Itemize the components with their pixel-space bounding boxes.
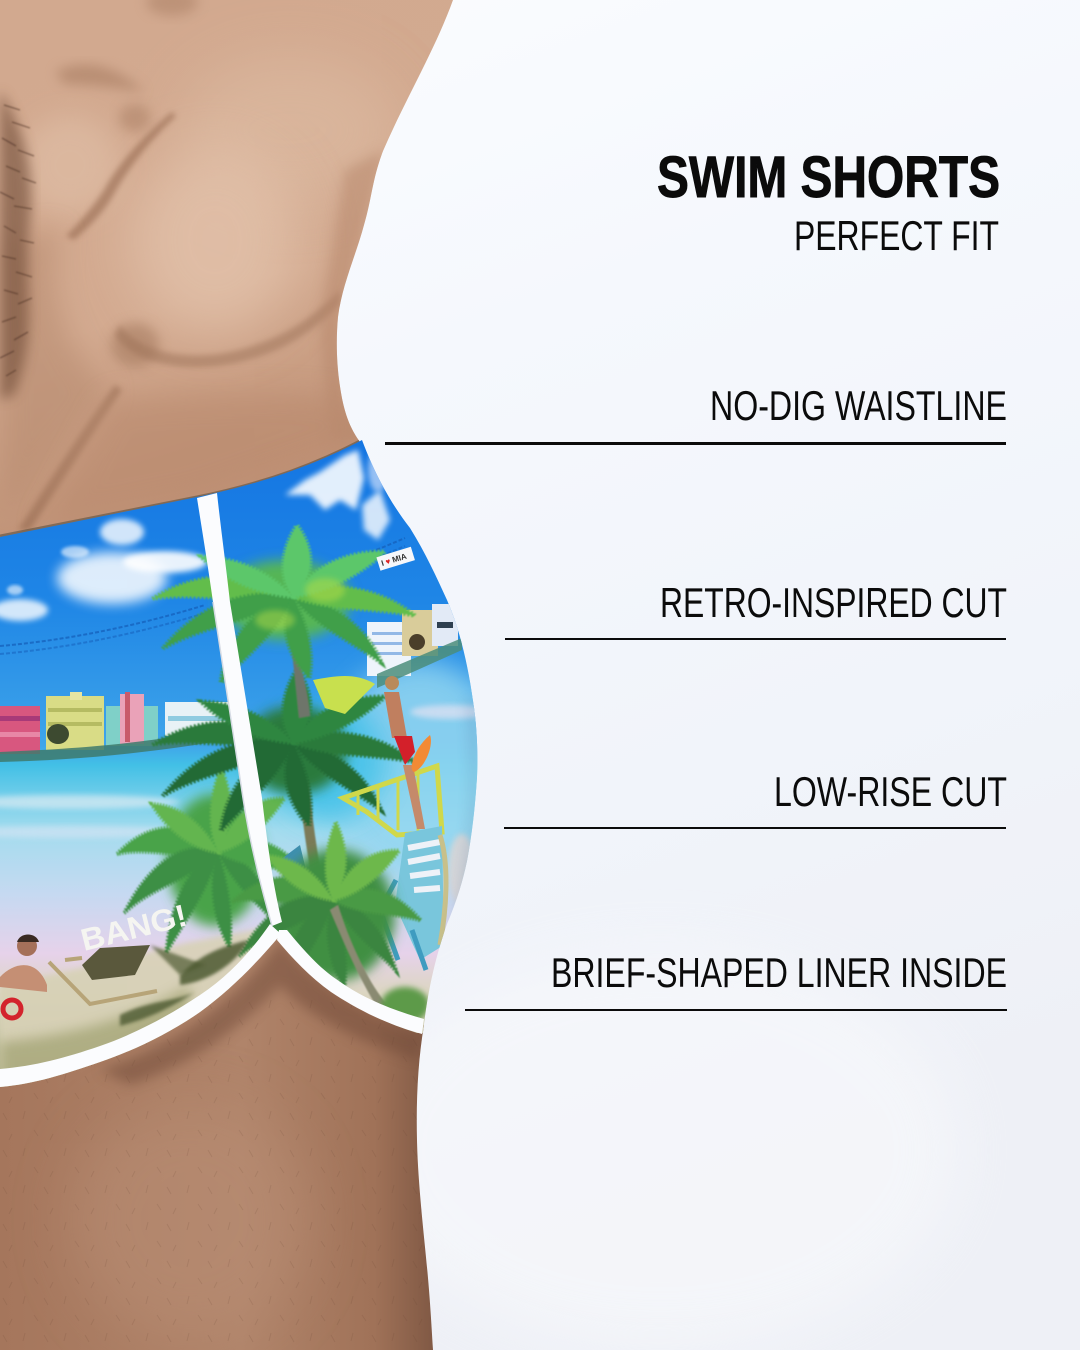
chest hair bbox=[0, 90, 36, 400]
beach sunbather bbox=[0, 934, 47, 1018]
model leg bbox=[0, 938, 433, 1350]
title bbox=[657, 145, 1000, 259]
hip shading bbox=[452, 702, 477, 909]
model torso bbox=[0, 0, 460, 560]
rib arc shadow bbox=[115, 290, 340, 367]
rib highlight bbox=[130, 145, 300, 335]
garment label bbox=[376, 547, 415, 571]
front seam piping bbox=[197, 493, 282, 926]
skyline right bbox=[367, 604, 462, 688]
sand bbox=[0, 926, 277, 1087]
lifeguard figure bbox=[384, 676, 431, 829]
white piping bbox=[0, 493, 424, 1087]
left hem piping bbox=[0, 924, 281, 1087]
palm: lower right bbox=[232, 822, 429, 1023]
lifeguard tower bbox=[280, 676, 446, 970]
right hem piping bbox=[277, 930, 424, 1034]
rear panel lighter sky bbox=[344, 646, 478, 887]
feature: low-rise cut: LOW-RISE CUT bbox=[774, 768, 1007, 815]
palm: upper bbox=[153, 525, 415, 718]
waist shade bbox=[82, 399, 354, 494]
sea highlights bbox=[0, 795, 180, 809]
clouds bbox=[0, 448, 390, 621]
title: SWIM SHORTS bbox=[657, 145, 1000, 210]
feature: no-dig waistline bbox=[385, 382, 1007, 445]
beach foliage shadows bbox=[120, 940, 248, 1026]
garment label: I ♥ MIA bbox=[380, 552, 408, 568]
brand mark: BANG! bbox=[77, 898, 190, 958]
palm: mid bbox=[153, 669, 415, 880]
dark beach edge bbox=[0, 984, 196, 1069]
upper shadow crease bbox=[55, 65, 145, 92]
hip crease bbox=[18, 385, 122, 530]
waistband edge shadow bbox=[0, 440, 362, 536]
subtitle: PERFECT FIT bbox=[794, 212, 999, 259]
stitched waistband bbox=[0, 538, 405, 646]
palm trees bbox=[117, 525, 415, 953]
palm: lower left bbox=[117, 767, 306, 953]
chest highlight bbox=[204, 70, 381, 186]
swim shorts bbox=[0, 430, 510, 1100]
beach lounger bbox=[49, 945, 157, 1004]
diagonal muscle line bbox=[66, 112, 176, 240]
skyline left bbox=[0, 692, 236, 762]
shorts print base bbox=[0, 430, 490, 1100]
side lat shade bbox=[320, 150, 385, 440]
